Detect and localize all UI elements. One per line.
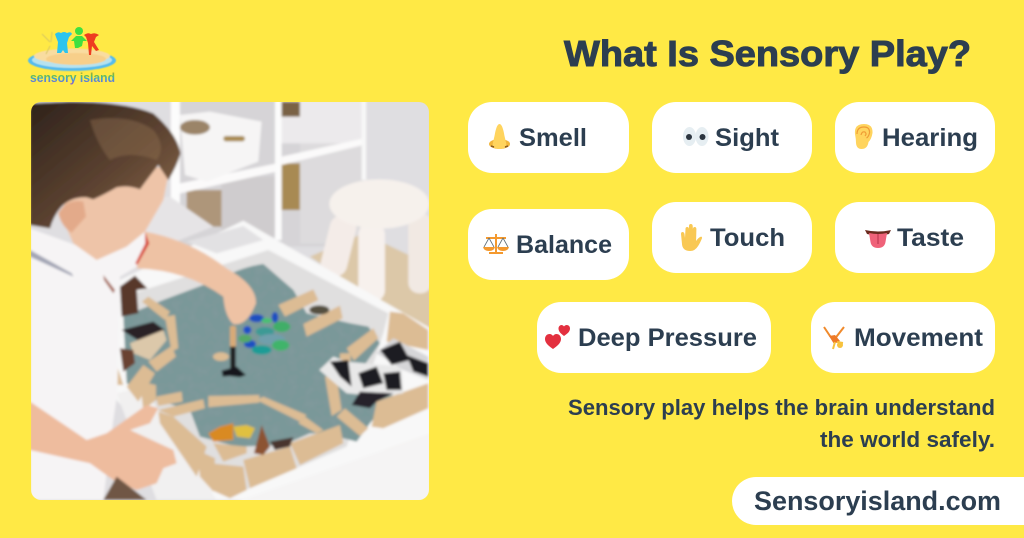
grey desk behind bbox=[168, 198, 214, 240]
pill: sight: Sight bbox=[715, 124, 780, 152]
icon: eyes bbox=[683, 127, 708, 146]
photo: boy playing in a sensory sand tray bbox=[30, 100, 433, 503]
stool bbox=[318, 179, 432, 302]
boy: white polo bbox=[30, 228, 149, 500]
pill: deep pressure: Deep Pressure bbox=[578, 324, 757, 352]
icon: nose bbox=[489, 124, 510, 149]
blue-green kinetic sand bbox=[123, 264, 400, 447]
pill: taste bbox=[835, 202, 995, 273]
website pill bbox=[732, 477, 1024, 525]
icon: two hearts bbox=[545, 325, 570, 349]
pill: hearing: Hearing bbox=[882, 124, 978, 152]
boy: hair bbox=[30, 102, 181, 228]
description text bbox=[568, 395, 995, 452]
pill: movement: Movement bbox=[854, 324, 984, 352]
floor bbox=[310, 235, 429, 328]
icon: tongue bbox=[865, 230, 891, 248]
logo wordmark: sensory island bbox=[30, 70, 115, 85]
icon: cartwheel bbox=[824, 327, 844, 349]
heading: What Is Sensory Play? bbox=[564, 33, 971, 74]
white storage bin bbox=[180, 112, 262, 182]
pill: taste: Taste bbox=[897, 224, 964, 252]
shelving unit bbox=[170, 100, 367, 247]
logo: sensory island bbox=[28, 27, 116, 85]
pill: touch bbox=[652, 202, 812, 273]
pill: hearing bbox=[835, 102, 995, 173]
icon: raised hand bbox=[681, 224, 702, 251]
boy: reaching arm bbox=[137, 232, 256, 324]
farm animals bbox=[120, 276, 428, 455]
icon: ear bbox=[855, 124, 873, 149]
icon: balance scale bbox=[483, 234, 509, 254]
pill: sight bbox=[652, 102, 812, 173]
wooden blocks bbox=[117, 289, 428, 498]
pill: smell bbox=[468, 102, 629, 173]
pill: deep pressure bbox=[537, 302, 771, 373]
logo island bbox=[28, 32, 116, 71]
white front of table bbox=[243, 434, 429, 500]
boy: near arm and hand bbox=[30, 402, 177, 490]
boy: face and neck bbox=[60, 167, 170, 260]
description text: Sensory play helps the brain understand bbox=[568, 395, 995, 420]
pill: smell: Smell bbox=[519, 124, 587, 152]
pill: balance: Balance bbox=[516, 231, 612, 259]
small rake bbox=[222, 326, 246, 377]
logo children bbox=[55, 27, 99, 55]
pill: touch: Touch bbox=[710, 224, 785, 252]
pill: movement bbox=[811, 302, 995, 373]
website pill: Sensoryisland.com bbox=[754, 486, 1001, 516]
table frame bbox=[117, 221, 433, 500]
pill: balance bbox=[468, 209, 629, 280]
wall bbox=[30, 100, 433, 503]
glass gems bbox=[238, 312, 290, 355]
description text: the world safely. bbox=[820, 427, 995, 452]
